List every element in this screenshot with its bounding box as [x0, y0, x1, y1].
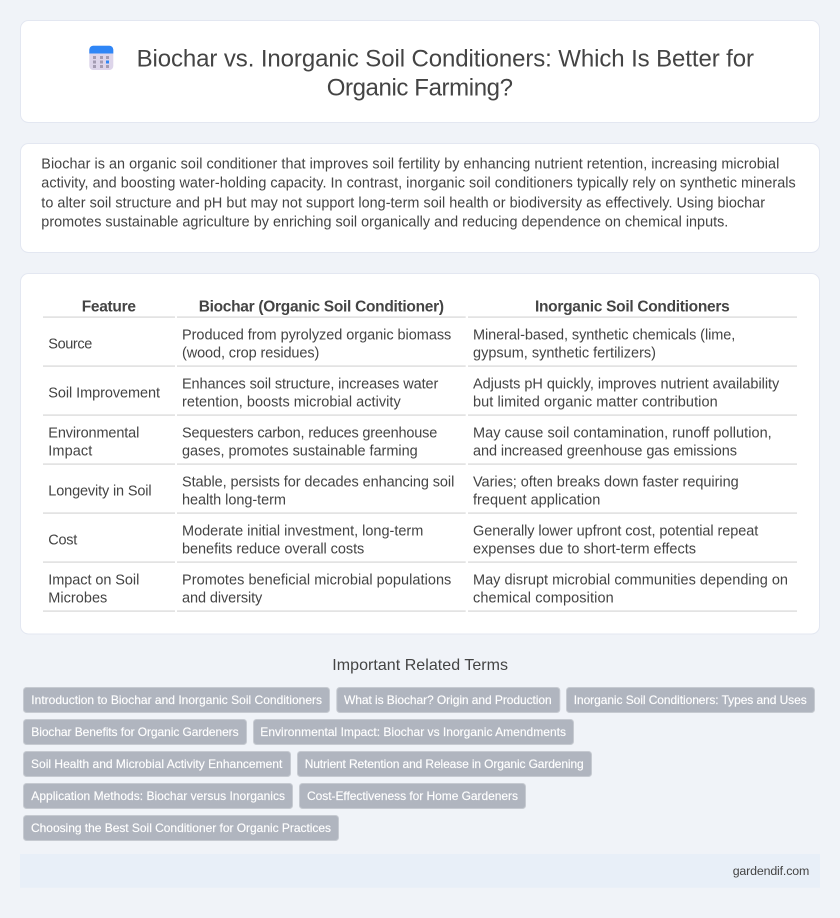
table row: longevity in soil	[43, 474, 797, 514]
table header row	[43, 299, 797, 318]
text block: introduction paragraph	[41, 156, 796, 231]
tag: Environmental Impact: Biochar vs Inorganic Amendments	[260, 725, 566, 739]
table row: source: (wood, crop residues)	[182, 345, 319, 361]
heading: important related terms: Important Related Terms	[332, 657, 508, 674]
table row: cost	[43, 523, 797, 563]
text block: introduction paragraph: Biochar is an organic soil conditioner that improves soil fertility by enhancing nutrient retention, increasing microbial	[41, 156, 779, 172]
tag	[24, 688, 330, 712]
table header row: Feature	[82, 299, 136, 316]
table row: cost: Moderate initial investment, long-term	[182, 523, 423, 539]
table row: environmental impact: May cause soil contamination, runoff pollution,	[473, 425, 772, 441]
table row: longevity in soil: Longevity in Soil	[48, 483, 152, 499]
table row: longevity in soil: Varies; often breaks down faster requiring	[473, 474, 739, 490]
table row: environmental impact: gases, promotes sustainable farming	[182, 443, 418, 459]
tag	[337, 688, 560, 712]
tag: What is Biochar? Origin and Production	[344, 693, 552, 707]
table row: soil improvement: retention, boosts microbial activity	[182, 394, 401, 410]
tag: Choosing the Best Soil Conditioner for Organic Practices	[31, 821, 331, 835]
title	[137, 46, 754, 102]
table row: soil improvement	[43, 376, 797, 416]
tag: Cost-Effectiveness for Home Gardeners	[307, 789, 518, 803]
text block: introduction paragraph: activity, and boosting water-holding capacity. In contrast, inorganic soil conditioners typically rely on synthetic minerals	[41, 176, 796, 192]
tag	[24, 784, 292, 808]
table row: environmental impact	[43, 425, 797, 465]
table row: cost: expenses due to short-term effects	[473, 541, 696, 557]
table row: environmental impact: Impact	[48, 443, 92, 459]
table header row: Inorganic Soil Conditioners	[535, 299, 730, 316]
table row: impact on soil microbes: Impact on Soil	[48, 572, 139, 588]
tag	[566, 688, 814, 712]
table row: impact on soil microbes: chemical composition	[473, 590, 614, 606]
tag	[300, 784, 526, 808]
table row: soil improvement: Adjusts pH quickly, improves nutrient availability	[473, 376, 780, 392]
table row: longevity in soil: frequent application	[473, 492, 600, 508]
table row: source: Mineral-based, synthetic chemicals (lime,	[473, 327, 735, 343]
table row: environmental impact: Sequesters carbon, reduces greenhouse	[182, 425, 437, 441]
table row: cost: Cost	[48, 532, 77, 548]
tag: Nutrient Retention and Release in Organic Gardening	[305, 757, 584, 771]
icon: calendar	[89, 46, 113, 70]
tag: Biochar Benefits for Organic Gardeners	[31, 725, 239, 739]
table row: impact on soil microbes: and diversity	[182, 590, 263, 606]
table row: impact on soil microbes: Promotes beneficial microbial populations	[182, 572, 451, 588]
table row: impact on soil microbes: May disrupt microbial communities depending on	[473, 572, 788, 588]
panel: introduction	[20, 144, 820, 252]
footer bar	[20, 854, 820, 888]
table row: source	[43, 327, 797, 367]
tag	[24, 752, 290, 776]
table row: cost: benefits reduce overall costs	[182, 541, 364, 557]
table row: environmental impact: Environmental	[48, 425, 139, 441]
text block: introduction paragraph: promotes sustainable agriculture by enriching soil organically and reducing dependence on chemical inputs.	[41, 215, 728, 231]
tag	[24, 720, 246, 744]
table row: impact on soil microbes	[43, 572, 797, 612]
panel: title header	[20, 20, 820, 122]
related terms tag list	[24, 688, 814, 840]
table row: soil improvement: but limited organic matter contribution	[473, 394, 718, 410]
tag	[298, 752, 592, 776]
table row: longevity in soil: Stable, persists for decades enhancing soil	[182, 474, 454, 490]
tag	[24, 816, 338, 840]
table row: soil improvement: Enhances soil structure, increases water	[182, 376, 438, 392]
tag: Soil Health and Microbial Activity Enhancement	[31, 757, 283, 771]
title: Organic Farming?	[327, 75, 513, 102]
table row: soil improvement: Soil Improvement	[48, 385, 160, 401]
table row: source: Source	[48, 336, 92, 352]
table row: cost: Generally lower upfront cost, potential repeat	[473, 523, 758, 539]
tag: Application Methods: Biochar versus Inorganics	[31, 789, 285, 803]
text block: introduction paragraph: to alter soil structure and pH but may not support long-term soil health or biodiversity as effectively. Using biochar	[41, 195, 765, 211]
table header row: Biochar (Organic Soil Conditioner)	[199, 299, 444, 316]
table row: impact on soil microbes: Microbes	[48, 590, 107, 606]
table row: source: gypsum, synthetic fertilizers)	[473, 345, 656, 361]
tag: Inorganic Soil Conditioners: Types and Uses	[574, 693, 807, 707]
panel: comparison table	[20, 274, 820, 634]
table row: environmental impact: and increased greenhouse gas emissions	[473, 443, 737, 459]
title: Biochar vs. Inorganic Soil Conditioners: Which Is Better for	[137, 46, 754, 73]
table row: longevity in soil: health long-term	[182, 492, 286, 508]
table row: source: Produced from pyrolyzed organic biomass	[182, 327, 451, 343]
tag: Introduction to Biochar and Inorganic Soil Conditioners	[31, 693, 322, 707]
tag	[254, 720, 574, 744]
footer bar: gardendif.com	[733, 864, 809, 878]
